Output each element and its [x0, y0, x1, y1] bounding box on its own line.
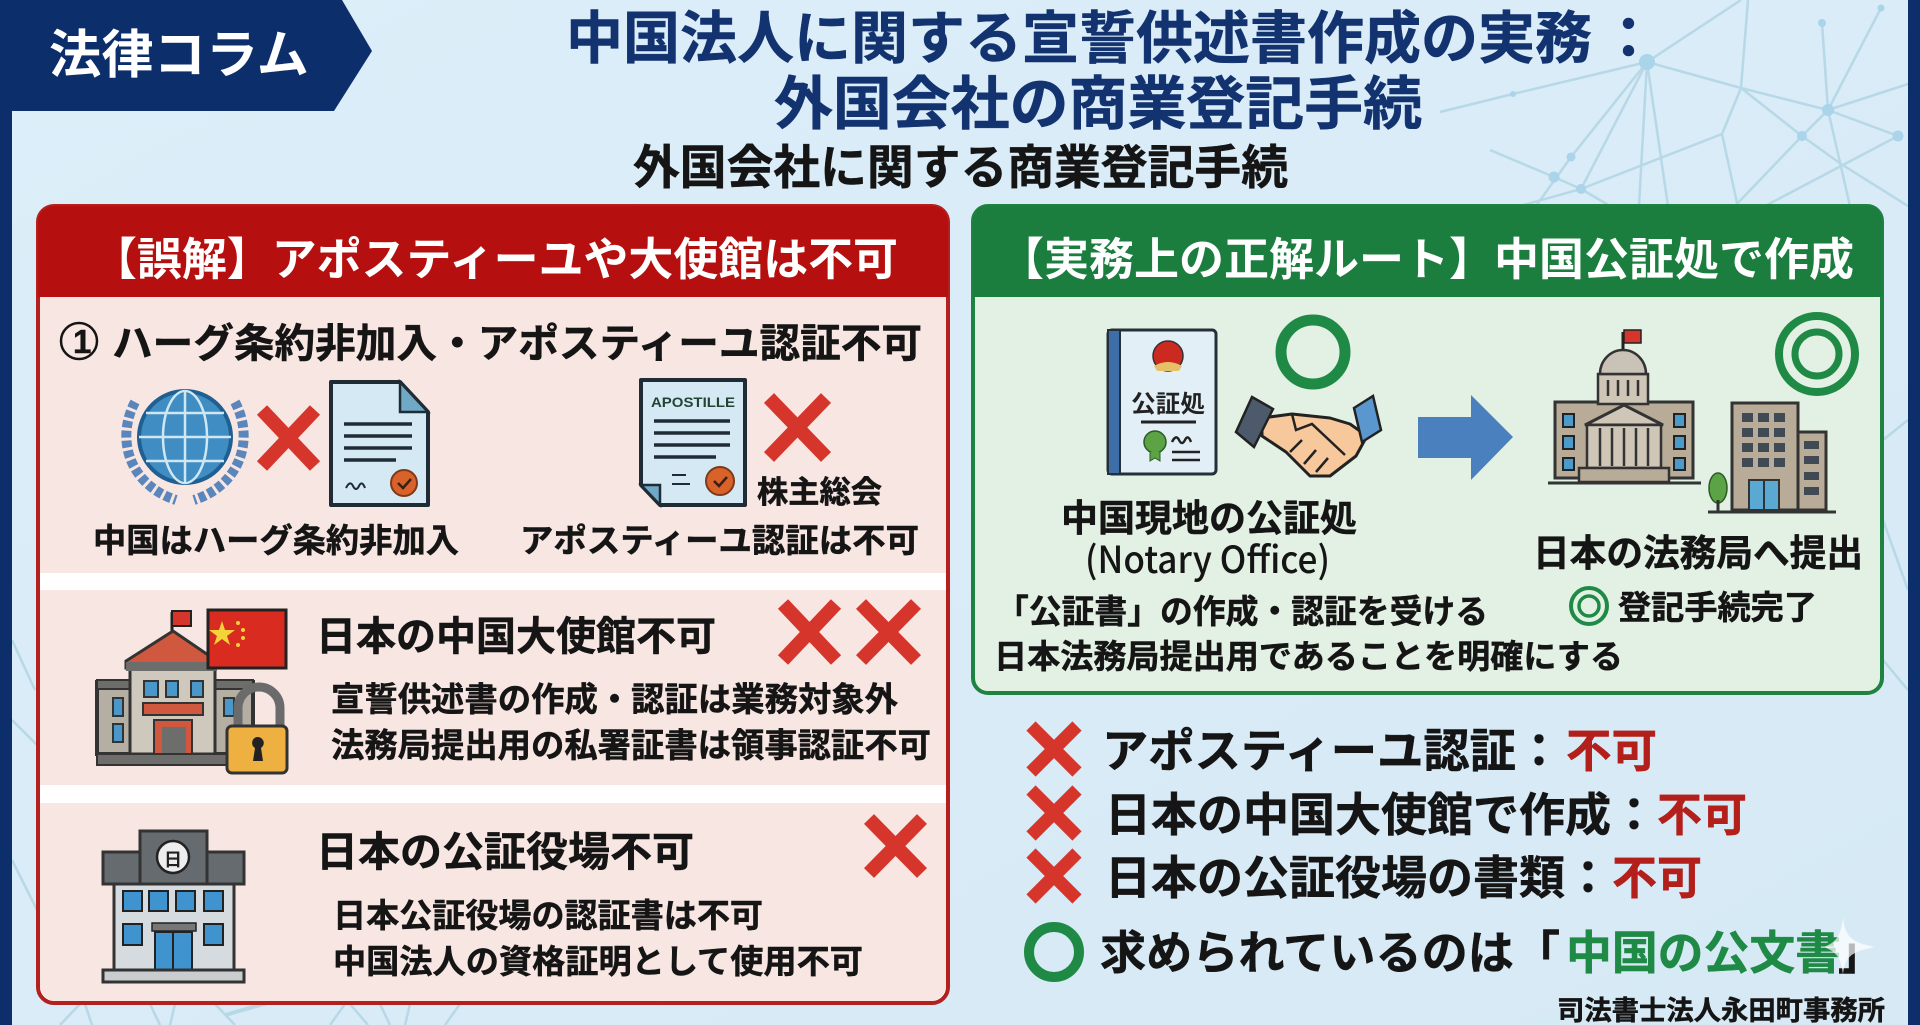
header text: correct route: 【実務上の正解ルート】中国公証処で作成	[999, 234, 1854, 285]
icon: embassy with lock	[97, 610, 287, 773]
icon: apostille document: APOSTILLE	[651, 394, 735, 410]
panel header: correct route	[973, 206, 1882, 297]
title: 中国法人に関する宣誓供述書作成の実務	[566, 7, 1592, 71]
icon: apostille document	[641, 380, 745, 505]
heading: embassy not allowed: 日本の中国大使館不可	[316, 615, 716, 659]
text: embassy details: 宣誓供述書の作成・認証は業務対象外	[331, 682, 899, 719]
icon: UN globe	[126, 391, 244, 500]
icon: document	[331, 382, 428, 505]
icon: office building	[1708, 403, 1836, 512]
section 1 heading: 1	[73, 323, 91, 360]
text: notarial certificate notes: 日本法務局提出用であることを明確にする	[994, 638, 1623, 675]
icon: notary office: 日	[164, 850, 182, 870]
text: embassy details: 法務局提出用の私署証書は領事認証不可	[331, 728, 931, 765]
section 1: Hague / apostille	[40, 297, 946, 573]
subtitle: 外国会社に関する商業登記手続	[633, 141, 1288, 194]
summary list	[1029, 725, 1884, 979]
panel: misconception	[38, 206, 948, 1003]
label: Notary Office: (Notary Office)	[1085, 530, 1330, 584]
text: notary details	[333, 897, 863, 980]
section 1 heading: ハーグ条約非加入・アポスティーユ認証不可	[112, 322, 922, 366]
text: notary details: 中国法人の資格証明として使用不可	[333, 943, 863, 980]
summary row 4: 」	[1838, 927, 1884, 979]
text: notarial certificate notes	[994, 593, 1623, 675]
icon: X	[769, 398, 826, 457]
text: notarial certificate notes: 「公証書」の作成・認証を受ける	[996, 593, 1488, 630]
icon: double circle mark	[1779, 316, 1855, 392]
panel header: misconception	[38, 206, 948, 297]
summary row 4	[1029, 927, 1884, 979]
summary row 1: ：	[1516, 725, 1562, 777]
label: shareholders meeting: 株主総会	[757, 475, 882, 510]
section 3: Japanese notary	[40, 803, 946, 1001]
summary row 3: ：	[1565, 852, 1611, 904]
panel: correct route	[973, 206, 1882, 693]
icon: X	[869, 819, 922, 873]
summary row 2: ：	[1611, 789, 1657, 841]
summary row 4: 中国の公文書	[1566, 927, 1841, 979]
text: embassy details	[331, 682, 931, 765]
title	[566, 7, 1657, 137]
summary row 1	[1031, 725, 1657, 777]
header text: misconception: 【誤解】アポスティーユや大使館は不可	[92, 234, 898, 285]
banner: 法律コラム	[0, 0, 372, 111]
icon: circle mark	[1281, 320, 1345, 384]
title: 外国会社の商業登記手続	[774, 72, 1422, 137]
arrow	[1418, 395, 1513, 480]
icon: double X	[783, 604, 916, 660]
icon: notary book: 公証処	[1131, 391, 1205, 418]
text: notary details: 日本公証役場の認証書は不可	[333, 897, 763, 934]
summary row 3	[1031, 852, 1702, 904]
icon: notary book	[1108, 330, 1216, 474]
summary row 3: 不可	[1612, 852, 1702, 904]
icon: sparkle	[1824, 917, 1875, 975]
title: ：	[1600, 7, 1657, 71]
banner: 法律コラム: 法律コラム	[49, 27, 309, 85]
icon: handshake	[1236, 396, 1381, 476]
summary row 2: 不可	[1657, 789, 1747, 841]
heading: notary not allowed: 日本の公証役場不可	[316, 829, 694, 875]
summary row 1: 不可	[1566, 725, 1657, 777]
section 2: embassy	[40, 590, 946, 785]
summary row 2: 日本の中国大使館で作成	[1105, 789, 1611, 841]
icon: government building	[1548, 330, 1701, 483]
label: China not in Hague: 中国はハーグ条約非加入	[93, 522, 459, 559]
summary row 1: アポスティーユ認証	[1102, 725, 1516, 777]
label: local notary office: 中国現地の公証処	[1061, 498, 1357, 539]
label: apostille not allowed: アポスティーユ認証は不可	[520, 522, 919, 559]
icon: X	[262, 410, 315, 466]
label: submit to legal affairs bureau: 日本の法務局へ提出	[1533, 533, 1863, 574]
icon: notary office	[103, 831, 244, 982]
registration complete: 登記手続完了	[1618, 589, 1817, 626]
summary row 3: 日本の公証役場の書類	[1105, 852, 1565, 904]
summary row 4: 求められているのは「	[1100, 927, 1560, 979]
